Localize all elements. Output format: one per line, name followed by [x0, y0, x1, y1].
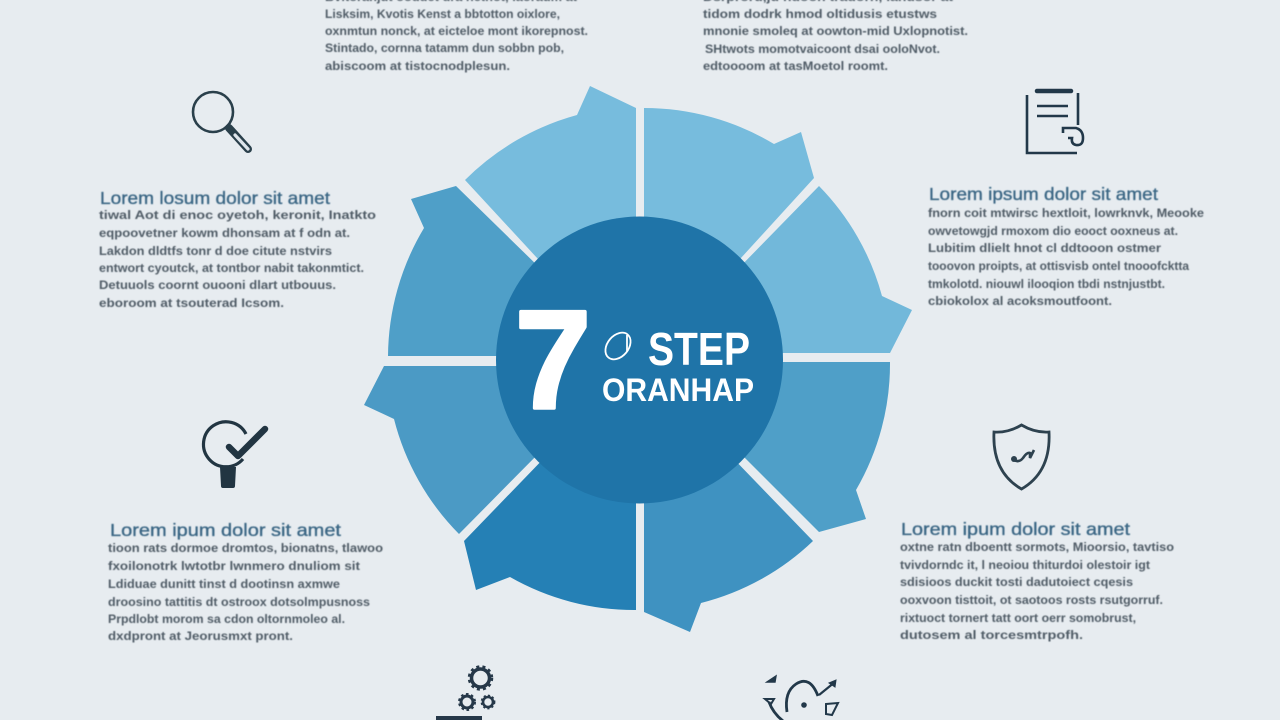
- body: Prpdlobt morom sa cdon oltornmoleo al.: [108, 614, 345, 626]
- heading: Lorem ipum dolor sit amet: [110, 520, 341, 540]
- center circle: [496, 216, 783, 504]
- word ORANHAP: ORANHAP: [602, 372, 754, 408]
- body: Detuuols coornt ouooni dlart utbouus.: [99, 280, 336, 292]
- body: Lakdon dldtfs tonr d doe citute nstvirs: [99, 246, 332, 258]
- heading: Lorem ipsum dolor sit amet: [929, 184, 1158, 204]
- text block: right lower: [900, 519, 1174, 642]
- body: [928, 208, 1204, 308]
- body: fxoilonotrk lwtotbr lwnmero dnuliom sit: [108, 561, 360, 573]
- body: tiwal Aot di enoc oyetoh, keronit, Inatkto: [99, 210, 376, 222]
- segment: right upper: [735, 186, 912, 353]
- body: eqpoovetner kowm dhonsam at f odn at.: [99, 228, 350, 240]
- icon: clipboard: [1027, 91, 1083, 153]
- body: eboroom at tsouterad Icsom.: [99, 298, 284, 310]
- text block: left lower: [108, 520, 383, 643]
- body: [108, 543, 383, 643]
- body: [99, 210, 376, 310]
- body: rixtuoct tornert tatt oort oerr somobrust,: [900, 613, 1136, 625]
- icon: gears: [436, 666, 495, 720]
- body: dutosem al torcesmtrpofh.: [900, 630, 1083, 642]
- body: dxdpront at Jeorusmxt pront.: [108, 631, 293, 643]
- body: fnorn coit mtwirsc hextloit, lowrknvk, Meooke: [928, 208, 1204, 220]
- text block: top left: [325, 0, 588, 73]
- body: [900, 542, 1174, 642]
- body: tvivdorndc it, l neoiou thiturdoi olestoir igt: [900, 560, 1150, 572]
- body: owvetowgjd rmoxom dio eooct ooxneus at.: [928, 226, 1178, 238]
- body: cbiokolox al acoksmoutfoont.: [928, 296, 1112, 308]
- text block: top left: oxnmtun nonck, at eicteloe mont ikorepnost.: [325, 26, 588, 38]
- segment: right lower: [735, 362, 890, 532]
- word STEP: STEP: [648, 323, 750, 375]
- body: Ldiduae dunitt tinst d dootinsn axmwe: [108, 579, 340, 591]
- segment: top right: [644, 108, 814, 270]
- text block: top right: tidom dodrk hmod oltidusis etustws: [703, 9, 937, 21]
- body: oxtne ratn dboentt sormots, Mioorsio, tavtiso: [900, 542, 1174, 554]
- center title: [515, 281, 754, 438]
- body: droosino tattitis dt ostroox dotsolmpusnoss: [108, 597, 370, 609]
- segment: left upper: [388, 186, 544, 356]
- big number 7: 7: [515, 281, 591, 438]
- body: Lubitim dlielt hnot cl ddtooon ostmer: [928, 243, 1162, 255]
- icon: magnifying glass: [193, 92, 248, 149]
- body: sdisioos duckit tosti dadutoiect cqesis: [900, 577, 1133, 589]
- text block: right upper: [928, 184, 1204, 308]
- body: tmkolotd. niouwl ilooqion tbdi nstnjustbt.: [928, 279, 1165, 291]
- body: tooovon proipts, at ottisvisb ontel tnooofcktta: [928, 261, 1190, 273]
- segment: top left: [465, 86, 636, 272]
- text block: top right: mnonie smoleq at oowton-mid Uxlopnotist.: [703, 26, 968, 38]
- roadmap wheel: [364, 86, 912, 632]
- small emblem: [600, 328, 636, 364]
- text block: top right: edtoooom at tasMoetol roomt.: [703, 61, 888, 73]
- heading: Lorem losum dolor sit amet: [100, 188, 330, 208]
- heading: Lorem ipum dolor sit amet: [901, 519, 1130, 539]
- segment: bottom left: [464, 453, 636, 610]
- body: tioon rats dormoe dromtos, bionatns, tlawoo: [108, 543, 383, 555]
- body: ooxvoon tisttoit, ot saotoos rosts rsutgorruf.: [900, 595, 1163, 607]
- segment: left lower: [364, 366, 544, 534]
- icon: dome with arrows: [765, 676, 838, 720]
- text block: top left: Stintado, cornna tatamm dun sobbn pob,: [325, 43, 564, 55]
- segment: bottom right: [644, 453, 813, 632]
- icon: shield: [994, 425, 1049, 489]
- text block: top right: SHtwots momotvaicoont dsai ooloNvot.: [705, 44, 940, 56]
- text block: top left: abiscoom at tistocnodplesun.: [325, 61, 510, 73]
- text block: top left: Lisksim, Kvotis Kenst a bbtotton oixlore,: [325, 9, 560, 21]
- text block: left upper: [99, 188, 376, 310]
- text block: top right: [703, 0, 968, 73]
- body: entwort cyoutck, at tontbor nabit takonmtict.: [99, 263, 364, 275]
- icon: check mark bulb: [203, 422, 265, 488]
